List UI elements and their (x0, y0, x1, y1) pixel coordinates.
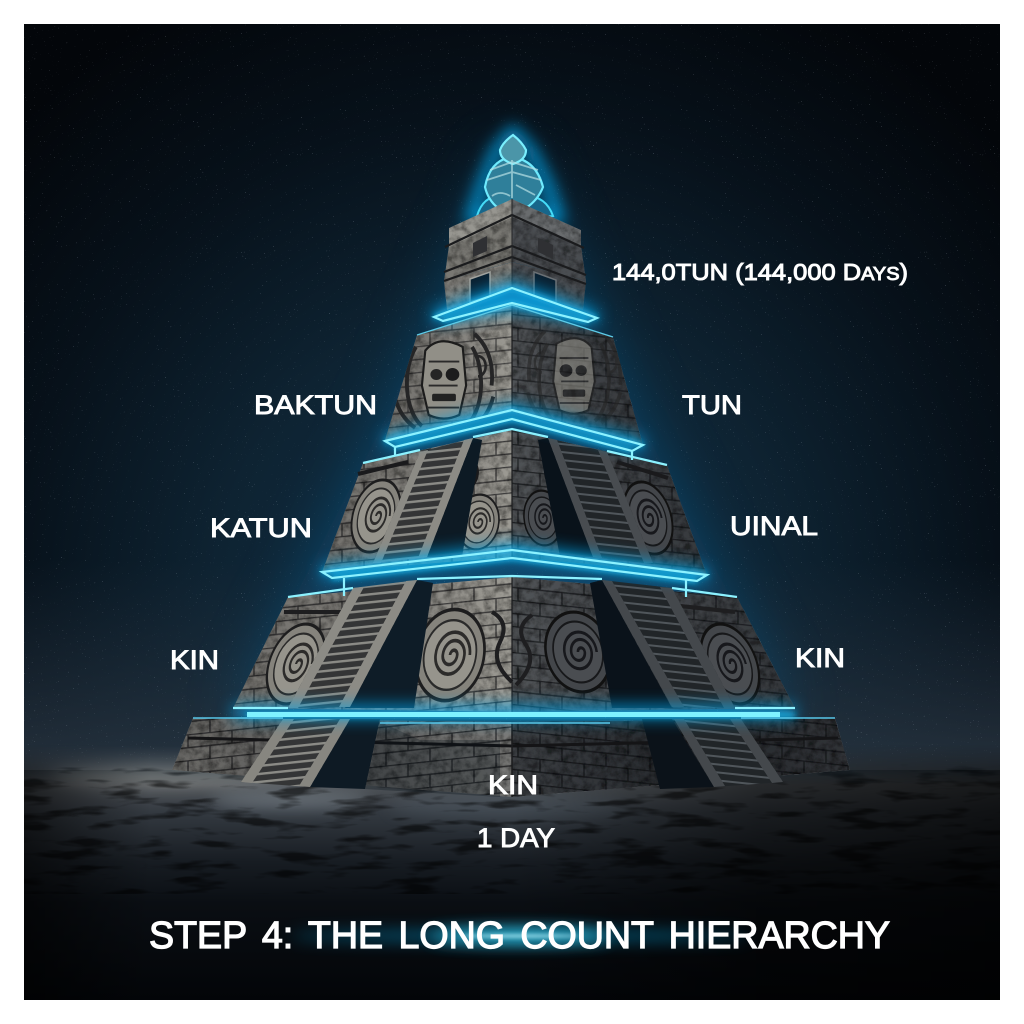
carved mask left (395, 334, 493, 428)
tier: second level (322, 430, 707, 575)
spiral carvings (346, 462, 678, 554)
left stair (373, 438, 482, 563)
label: katun: KATUN (210, 513, 312, 543)
title: STEP 4: THE LONG COUNT HIERARCHY (149, 915, 890, 957)
icon: glowing finial (472, 132, 558, 220)
label: 144,000 days: 144,0TUN (144,000 D AYS) (612, 259, 908, 285)
pyramid (172, 132, 850, 797)
right stair (538, 438, 653, 563)
label: uinal: UINAL (730, 511, 818, 541)
tier: top tower (444, 199, 586, 310)
left stair (288, 580, 433, 708)
neon lines (193, 288, 835, 723)
base stairs right (642, 719, 783, 789)
neon ledges (193, 288, 835, 723)
carved mask right (528, 331, 621, 423)
tier: base platform (172, 718, 850, 797)
label: tun: TUN (682, 390, 742, 420)
pyramid halo (235, 140, 790, 715)
label: kin right: KIN (795, 643, 845, 673)
neon glow (233, 288, 795, 712)
tower windows (470, 272, 556, 302)
stone ground (24, 745, 1000, 1000)
base stairs left (241, 719, 380, 789)
tier: third level (233, 577, 795, 712)
label: one day: 1 DAY (477, 823, 555, 853)
label: baktun: BAKTUN (254, 390, 377, 420)
tier: first level with carved masks (385, 305, 643, 445)
title glow (290, 929, 750, 943)
right stair (590, 580, 735, 708)
night sky background (24, 24, 1000, 784)
label: kin base: KIN (488, 770, 538, 800)
label: kin left: KIN (170, 645, 219, 675)
spiral carvings (259, 606, 767, 704)
